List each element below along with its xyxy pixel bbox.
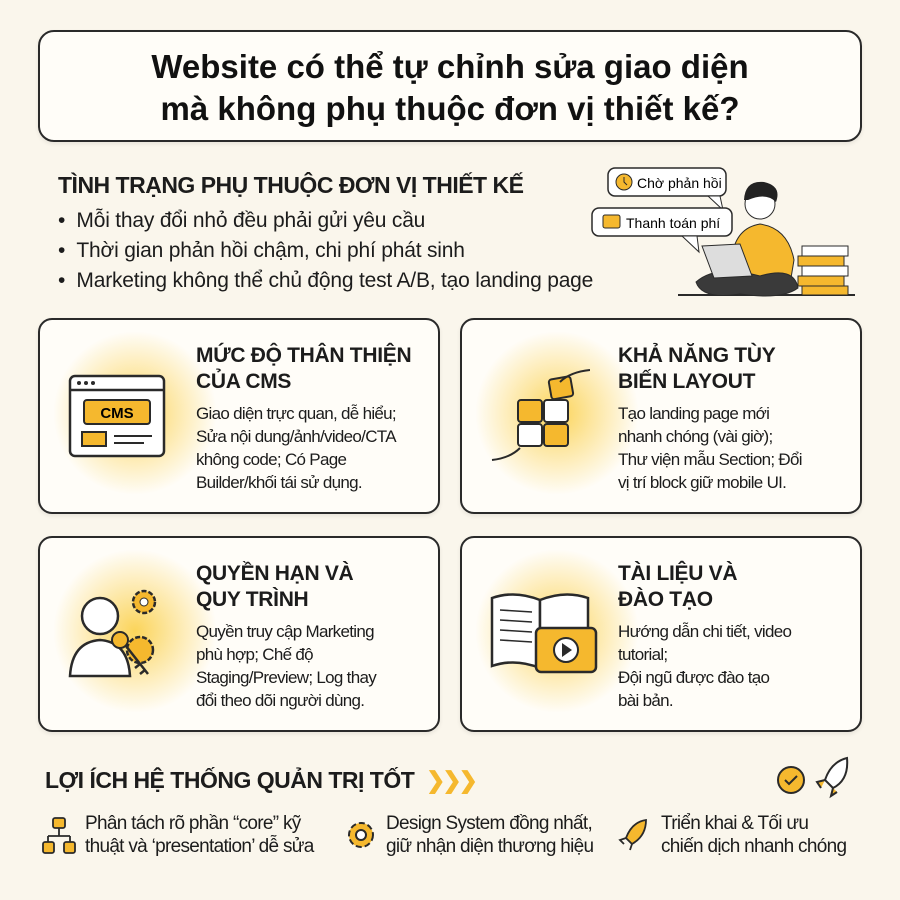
card title: [618, 342, 776, 393]
card title: [618, 560, 737, 611]
benefit 3: Triển khai & Tối ưu: [661, 813, 808, 834]
title: mà không phụ thuộc đơn vị thiết kế?: [161, 90, 739, 127]
bullets: • Marketing không thể chủ động test A/B, tạo landing page: [58, 269, 593, 292]
bullets: • Thời gian phản hồi chậm, chi phí phát sinh: [58, 239, 465, 262]
card body: Builder/khối tái sử dụng.: [196, 473, 362, 492]
card body: Staging/Preview; Log thay: [196, 668, 376, 687]
card body: bài bản.: [618, 691, 673, 710]
bullets: • Mỗi thay đổi nhỏ đều phải gửi yêu cầu: [58, 209, 425, 232]
card title: QUY TRÌNH: [196, 588, 308, 611]
callout: payment: Thanh toán phí: [626, 215, 720, 231]
benefit 2: giữ nhận diện thương hiệu: [386, 836, 593, 857]
callout: waiting: [608, 168, 726, 210]
section: dependency status: [58, 172, 593, 292]
card title: CỦA CMS: [196, 370, 291, 393]
icons: check and rocket: [777, 756, 848, 798]
benefit 3: [618, 813, 846, 857]
card title: [196, 342, 411, 393]
card body: [196, 404, 396, 492]
icon: gear: [348, 822, 374, 848]
card title: ĐÀO TẠO: [618, 588, 713, 611]
card: docs and training: [460, 536, 862, 732]
card: layout customization: [460, 318, 862, 514]
card body: [196, 622, 377, 710]
card body: nhanh chóng (vài giờ);: [618, 427, 773, 446]
card body: đổi theo dõi người dùng.: [196, 691, 364, 710]
card title: TÀI LIỆU VÀ: [618, 562, 737, 585]
benefit 2: [348, 813, 593, 857]
benefit 1: thuật và ‘presentation’ dễ sửa: [85, 836, 314, 857]
icon: book and video: [490, 593, 598, 674]
icon: CMS window: CMS: [100, 405, 134, 422]
benefit 2: Design System đồng nhất,: [386, 813, 592, 834]
card body: Giao diện trực quan, dễ hiểu;: [196, 404, 396, 423]
card title: BIẾN LAYOUT: [618, 370, 755, 393]
icon: hands with blocks: [492, 369, 590, 461]
card title: QUYỀN HẠN VÀ: [196, 562, 353, 585]
title: Website có thể tự chỉnh sửa giao diện: [151, 48, 749, 85]
card body: Quyền truy cập Marketing: [196, 622, 374, 641]
card: permissions and process: [38, 536, 440, 732]
card: CMS friendliness: [38, 318, 440, 514]
card body: [618, 404, 802, 492]
icon: CMS window: [68, 374, 166, 458]
callout: waiting: Chờ phản hồi: [637, 175, 722, 191]
benefit 1: Phân tách rõ phần “core” kỹ: [85, 813, 301, 834]
icon: user with gears and key: [68, 590, 156, 678]
card body: vị trí block giữ mobile UI.: [618, 473, 786, 492]
card body: Hướng dẫn chi tiết, video: [618, 622, 791, 641]
callout: payment: [592, 208, 732, 252]
card title: KHẢ NĂNG TÙY: [618, 344, 775, 367]
benefit 1: [42, 813, 314, 857]
card body: [618, 622, 792, 710]
card body: tutorial;: [618, 645, 667, 664]
card body: Đội ngũ được đào tạo: [618, 668, 769, 687]
card body: Tạo landing page mới: [618, 404, 769, 423]
icon: hierarchy: [42, 817, 76, 854]
bullets: [58, 208, 593, 292]
benefit 3: chiến dịch nhanh chóng: [661, 836, 846, 857]
card title: MỨC ĐỘ THÂN THIỆN: [196, 344, 411, 367]
benefits heading: LỢI ÍCH HỆ THỐNG QUẢN TRỊ TỐT ❯❯❯: [45, 767, 475, 793]
illustration: person with laptop: [591, 167, 855, 296]
title: [38, 30, 862, 142]
card body: Thư viện mẫu Section; Đổi: [618, 450, 802, 469]
card body: không code; Có Page: [196, 450, 346, 469]
heading: TÌNH TRẠNG PHỤ THUỘC ĐƠN VỊ THIẾT KẾ: [58, 172, 523, 198]
icon: rocket: [618, 819, 647, 850]
card title: [196, 561, 354, 611]
card body: phù hợp; Chế độ: [196, 645, 313, 664]
card body: Sửa nội dung/ảnh/video/CTA: [196, 427, 396, 446]
